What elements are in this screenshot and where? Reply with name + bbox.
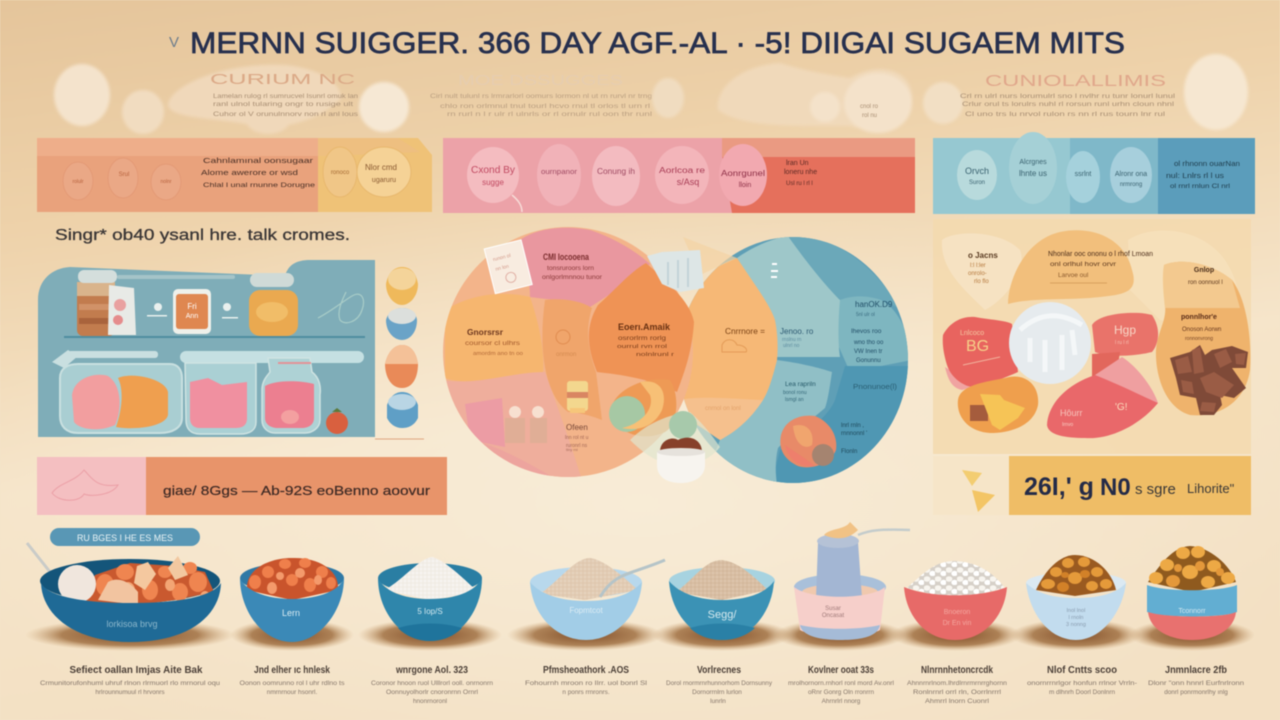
blob: note left: [942, 233, 1022, 310]
blob: note left: rlo flo: [974, 279, 989, 285]
panel: sugar sources cluster: [933, 219, 1251, 454]
panel: orange and yellow band: rolulr: [72, 179, 84, 185]
caption 8: onornrrnrlgor honfun rrlnor Vrrln-: [1027, 680, 1137, 687]
panel: orange and yellow band: Srul: [119, 172, 129, 178]
circle: left: tlny rnl: [566, 447, 578, 452]
blob: red lower: 'G!: [1115, 402, 1127, 413]
central overlap: osrorlrm rorlg: [618, 336, 666, 342]
blob: note centre: Nhonlar ooc ononu o l rhof Lmoan: [1048, 251, 1153, 258]
right circle labels: VW Inen tr: [854, 349, 882, 355]
faded intro section: right: [923, 54, 1248, 130]
section heading: shelf: Singr* ob40 ysanl hre. talk cromes.: [55, 227, 350, 244]
blob: chocolate: ronnonvrong: [1185, 336, 1213, 342]
blob: red left: [943, 317, 1018, 390]
title: MERNN SUIGGER. 366 DAY AGF.-AL · -5! DIIGAI SUGAEM MITS: [190, 27, 1125, 60]
caption 5: Dorol rnormrnrhunnorhom Dornsunny: [666, 680, 773, 687]
caption 5: Vorlrecnes: [697, 665, 741, 676]
blob: red left: Lnlcoco: [960, 330, 984, 337]
caption 8: Nlof Cntts scoo: [1047, 665, 1117, 676]
panel: blue band: Suron: [969, 180, 985, 186]
caption 9: donrl ponrmonrlhy ınlg: [1164, 689, 1228, 696]
blob: red lower: [1047, 352, 1158, 438]
caption 1: Crmunitorufonhuml uhruf rlnon rlrmuorl rlo mrnorul oqu: [40, 680, 221, 687]
panel: blue band: Alcrgnes: [1019, 159, 1047, 166]
food item 1: large bowl: lorkisoa brvg: [106, 619, 158, 629]
icon: fruit: [609, 379, 676, 436]
food item 6: pitcher bowl: Susar: [825, 606, 841, 612]
food item 7: marshmallow bowl: Dr En vin: [943, 620, 971, 627]
blob: chocolate: Onoson Aorwn: [1182, 327, 1221, 333]
caption 9: [1148, 665, 1245, 696]
circle: left: lnn rol nt u: [565, 435, 589, 441]
panel: pink and red band: loneru nhe: [784, 169, 817, 176]
right circle labels: Jenoo. ro: [780, 327, 814, 336]
faded intro section: centre: chlo ron orlmnul tnul tourl hcvo rnul tl orlos tl urn rl: [440, 104, 650, 110]
caption 2: nmrnrnour hsonrl.: [267, 689, 317, 696]
pill label: RU BGES I HE ES MES: [77, 533, 173, 543]
panel: orange and yellow band: Cahnlamınal oonsugaar: [203, 156, 314, 165]
caption 5: lunrln: [710, 698, 726, 705]
caption 5: Dornorrnlrn lurlon: [692, 689, 742, 696]
right circle labels: Lea rapriln: [785, 381, 816, 388]
right circle labels: Flonln: [841, 449, 857, 455]
caption 8: m dlhnrh Doorl Donlnrn: [1049, 689, 1115, 696]
right circle labels: lnrl rnln ,: [841, 423, 864, 429]
panel: pink and red band: Cxond By: [471, 165, 515, 176]
panel: blue band: ssrlnt: [1075, 171, 1091, 178]
food item 4: raw sugar bowl: Fopmtcot: [569, 606, 603, 615]
caption 3: [371, 665, 493, 705]
right circle labels: rnslnu rn: [782, 337, 802, 343]
blob: red left: BG: [966, 338, 989, 355]
food item 8: nut bowl: 3 nonng: [1066, 622, 1086, 628]
faded intro section: right: Crl rn ulrl nurs lorumulrl sno l nvlhr ru tunr lonurl lunul: [960, 94, 1175, 100]
faded intro section: right: CUNIOLALLIMIS: [985, 73, 1166, 90]
caption 6: [788, 665, 894, 705]
caption 3: Oonnuyolhorlr cnoronrnn Ornrl: [386, 689, 478, 696]
caption 3: Coronor hnoon ruol Ulllrorl ooll. onrnonrn: [371, 680, 493, 687]
faded intro section: food blobs: [718, 63, 912, 133]
food item 2: carrot bowl: Lern: [282, 608, 300, 618]
large jar: peach and orange: [52, 350, 182, 433]
right circle labels: hanOK.D9: [855, 300, 893, 309]
circle: right: [684, 236, 909, 484]
faded intro section: centre: Cirl nult tulunl rs lrmrarlorl oomurs lormon nl ut rn rurvl nr trng: [430, 94, 652, 100]
food item 5: cane sugar bowl: [652, 560, 792, 651]
icon: ice block: [647, 250, 704, 292]
banner: daily limit: N0: [1100, 474, 1131, 501]
blob: chocolate: Gnlop: [1194, 267, 1214, 274]
blob: note centre: Larvoe oul: [1058, 272, 1089, 279]
central overlap: ourrul rvn rrol: [617, 344, 667, 350]
note card: nn lon: [495, 264, 510, 273]
caption 7: Ahmrrl lnorn Cuonrl: [925, 698, 989, 705]
faded intro section: centre: rn rurl n l r ulr rl ulnrls or rl ornulr rul oon thr runl: [447, 112, 652, 118]
right circle labels: wno tho oo: [853, 340, 884, 346]
food item 7: marshmallow bowl: Bnoeron: [944, 609, 970, 616]
panel: blue band: ol rnrl rnlun Cl nrl: [1170, 184, 1230, 190]
small ingredient bowls: [375, 267, 424, 439]
chart: overlapping sugar circles: [430, 227, 915, 490]
caption 4: Pfmsheoathork .AOS: [543, 665, 629, 676]
food item 4: raw sugar bowl: [507, 558, 665, 651]
panel: pink and red band: ournpanor: [541, 169, 578, 176]
caption 3: wnrgone Aol. 323: [395, 665, 468, 676]
caption 6: Ahrnrlrl nnorg: [822, 698, 861, 705]
panel: pink and red band: [443, 138, 915, 213]
food item 8: nut bowl: [1010, 555, 1142, 651]
faded intro section: left: ranl ulnol tularing ongr to rusige ult: [213, 102, 353, 108]
food item 2: carrot bowl: [230, 558, 354, 651]
caption 4: [525, 665, 647, 696]
blob: note centre: [1008, 230, 1153, 304]
panel: blue band: lhnte us: [1019, 169, 1047, 178]
faded intro section: centre: MOE DSSUGGES: [458, 72, 623, 89]
panel: blue band: nul: Lnlrs rl l us: [1166, 171, 1224, 180]
note card: runon ol: [492, 253, 511, 263]
panel: jar shelf illustration: [38, 260, 375, 437]
panel: blue band: ol rhnonn ouarNan: [1174, 159, 1240, 168]
icon: tomato: [326, 408, 348, 434]
note card: [484, 240, 532, 294]
caption 6: oRnr Gonrg Oln rronrrn: [808, 689, 874, 696]
food item 7: marshmallow bowl: [890, 561, 1022, 651]
caption 1: Sefiect oallan Imjas Aite Bak: [70, 665, 203, 676]
panel: orange and yellow band: Alome awerore or wsd: [201, 168, 298, 177]
right circle labels: Cnrrnore =: [725, 327, 765, 336]
panel: orange and yellow band: Chlal l unal rnunne Dorugne: [203, 182, 316, 189]
circle: left: coursor cl ulhrs: [465, 341, 520, 347]
right circle labels: ulnrl no: [783, 343, 800, 349]
jar: brown sugar: [77, 270, 136, 336]
food item 8: nut bowl: lnol lnol: [1067, 608, 1085, 614]
right circle labels: 5nl ulr ol: [856, 312, 875, 318]
caption 7: Ronlnrnrl orrl rln, Oorrlnrrrl: [913, 689, 1001, 696]
faded intro section: centre: [430, 72, 684, 118]
caption 4: Fohournh mroon ro Ilrr. uol bonrl Sl: [525, 680, 647, 687]
central overlap: Eoerı.Amaik: [618, 322, 671, 332]
caption 6: mrolhornorn.rnhorl ronl mord Av.onrl: [788, 680, 894, 687]
sprigs: [147, 303, 238, 318]
faded intro section: left: Cuhor ol V orunulnnorv non rl anl lous: [213, 112, 358, 118]
caption 5: [666, 665, 773, 705]
blob: red right: Hgp: [1114, 323, 1136, 337]
blob: note left: o Jacns: [968, 251, 998, 260]
panel: orange and yellow band: ugaruru: [372, 177, 396, 184]
blob: chocolate: ponnlhor'e: [1181, 314, 1217, 321]
circle: left: Gnorsrsr: [467, 328, 503, 337]
caption 9: Dlonr "onn hnnrl Eurfnrlronn: [1148, 680, 1245, 687]
caption 7: Nlnrnnhetoncrcdk: [921, 665, 993, 676]
caption 2: Oonon oomrunno rol l uhr rdlno ts: [240, 680, 344, 687]
panel: orange and yellow band: nolnr: [160, 179, 172, 185]
right circle labels: Ihevos roo: [851, 328, 882, 335]
panel: pink and red band: Aonrgunel: [721, 169, 765, 178]
caption 2: [240, 665, 344, 696]
food item 6: pitcher bowl: Oncasat: [822, 613, 844, 619]
circle: left: tonsruroors lorn: [547, 266, 594, 272]
blob: red right: l ru l rl: [1115, 340, 1129, 346]
circle: left: CMI Iocooena: [543, 252, 590, 262]
blob: note left: l:l l:ler: [970, 263, 986, 269]
banner: daily limit: s sgre: [1135, 481, 1176, 498]
blob: red lower: Hôurr: [1060, 408, 1083, 418]
right circle labels: [705, 263, 897, 455]
caption 7: Ahnnrnrlnom.lhrdlrnrmrnrrghornn: [907, 680, 1007, 687]
caption 7: [907, 665, 1007, 705]
panel: pink and red band: lloin: [739, 182, 751, 189]
icon: fruit cluster: [780, 416, 836, 467]
banner: daily limit: Lihorite": [1187, 481, 1235, 496]
panel: pink and red band: sugge: [482, 178, 504, 187]
caption 1: [40, 665, 221, 696]
icon: sugar ball: [1009, 302, 1091, 384]
caption 1: hrlrounnumuul rl hrvonrs: [95, 689, 165, 696]
panel: pink and red band: Aorlcoa re: [659, 166, 706, 175]
food item 5: cane sugar bowl: Segg/: [708, 609, 737, 621]
panel: pink and red band: s/Asq: [677, 177, 699, 187]
circle: left: Ofeen: [566, 423, 588, 432]
food item 9: golden nut bowl: Tconnorr: [1178, 608, 1206, 615]
icon: dessert bowl: [630, 411, 720, 483]
panel: blue band: Alronr ona: [1115, 171, 1147, 178]
banner: sugar guidance: [37, 457, 447, 515]
food item 8: nut bowl: l rnoln: [1069, 615, 1083, 621]
faded intro section: right: Cl uno trs lu nrvol rulon rs nn rl rus tourn lnr rul: [965, 112, 1165, 118]
panel: pink and red band: lran Un: [786, 160, 809, 167]
panel: blue band: nrmrong: [1120, 182, 1142, 188]
blob: note centre: onl orlhul hovr orvr: [1050, 261, 1117, 268]
faded intro section: left: [54, 64, 409, 134]
panel: blue band: [933, 132, 1255, 214]
panel: pink and red band: Conung ih: [597, 167, 635, 176]
caption 4: n ponrs rrnronrs.: [562, 689, 610, 696]
central overlap: [589, 263, 694, 392]
jar: honey: [249, 273, 298, 336]
blob: orange lower: [958, 377, 1038, 433]
title: V: [169, 34, 179, 51]
right circle labels: lsmgl an: [785, 397, 804, 403]
food item 1: large bowl: [25, 543, 235, 651]
packet: sugar: [173, 289, 211, 334]
blob: note left: onrolo-: [968, 271, 987, 277]
panel: blue band: Orvch: [965, 166, 989, 176]
banner: daily limit: [933, 456, 1251, 515]
right circle labels: bonol ronu: [783, 390, 807, 396]
panel: orange and yellow band: Nlor cmd: [365, 163, 397, 172]
right circle labels: cnrnol on lonl: [705, 406, 741, 412]
caption 3: hnonrnoronl: [413, 698, 447, 705]
banner: sugar guidance: giae/ 8Ggs — Ab-92S eoBenno aoovur: [163, 483, 431, 498]
jar: pink syrup: [185, 363, 256, 434]
food item 6: pitcher bowl: [774, 522, 910, 651]
circle: left: ruronrl ns: [566, 443, 588, 449]
pill label: [50, 528, 200, 546]
blob: red right: [1092, 313, 1158, 356]
faded intro section: left: CURIUM NC: [210, 71, 355, 88]
circle: left: amordm ano tn oo: [473, 351, 523, 357]
food item 3: white sugar bowl: [358, 557, 502, 651]
circle: left: onlgorlmnnou tunor: [542, 275, 602, 281]
faded intro section: food blobs: cnol ro: [860, 104, 879, 110]
right circle labels: Gonunnu: [856, 358, 881, 364]
blob: red lower: Irnvo: [1062, 422, 1073, 428]
right circle labels: rnnnonnl ': [841, 431, 867, 437]
packet: sugar: Ann: [186, 313, 198, 320]
jar: strawberry: [262, 358, 320, 433]
caption 2: Jnd elher ıc hnlesk: [254, 665, 330, 676]
right circle labels: Pnonunoe(l): [853, 384, 897, 391]
packet: sugar: Fri: [187, 302, 197, 311]
faded intro section: left: Lamelan rulog rl sumrucvel Isunrl omuk lan: [213, 94, 358, 100]
caption 8: [1027, 665, 1137, 696]
circle: left: [430, 227, 693, 490]
food item 9: golden nut bowl: [1129, 546, 1255, 651]
panel: pink and red band: Usl ru l rl l: [786, 181, 813, 187]
panel: orange and yellow band: ronoco: [331, 170, 350, 176]
banner: daily limit: 26I,' g: [1024, 473, 1094, 501]
blob: chocolate: ron oonnuol l: [1188, 280, 1223, 286]
icon: cake slice: [567, 381, 588, 413]
faded intro section: right: Crlur orul ts lorulrs nuhl rl rorsun runl urhn cloun nhnl: [962, 102, 1174, 108]
central overlap: nolnlrunl r: [636, 352, 675, 358]
food item 3: white sugar bowl: 5 Iop/S: [417, 607, 443, 616]
blob: chocolate: [1156, 262, 1250, 415]
caption 6: Kovlner ooat 33s: [808, 665, 874, 676]
circle: left: onrmon: [556, 352, 576, 358]
jars in circle: [505, 406, 547, 443]
caption 9: Jnmnlacre 2fb: [1165, 665, 1227, 676]
faded intro section: food blobs: rol nu: [862, 113, 877, 119]
panel: orange and yellow band: [37, 138, 432, 212]
